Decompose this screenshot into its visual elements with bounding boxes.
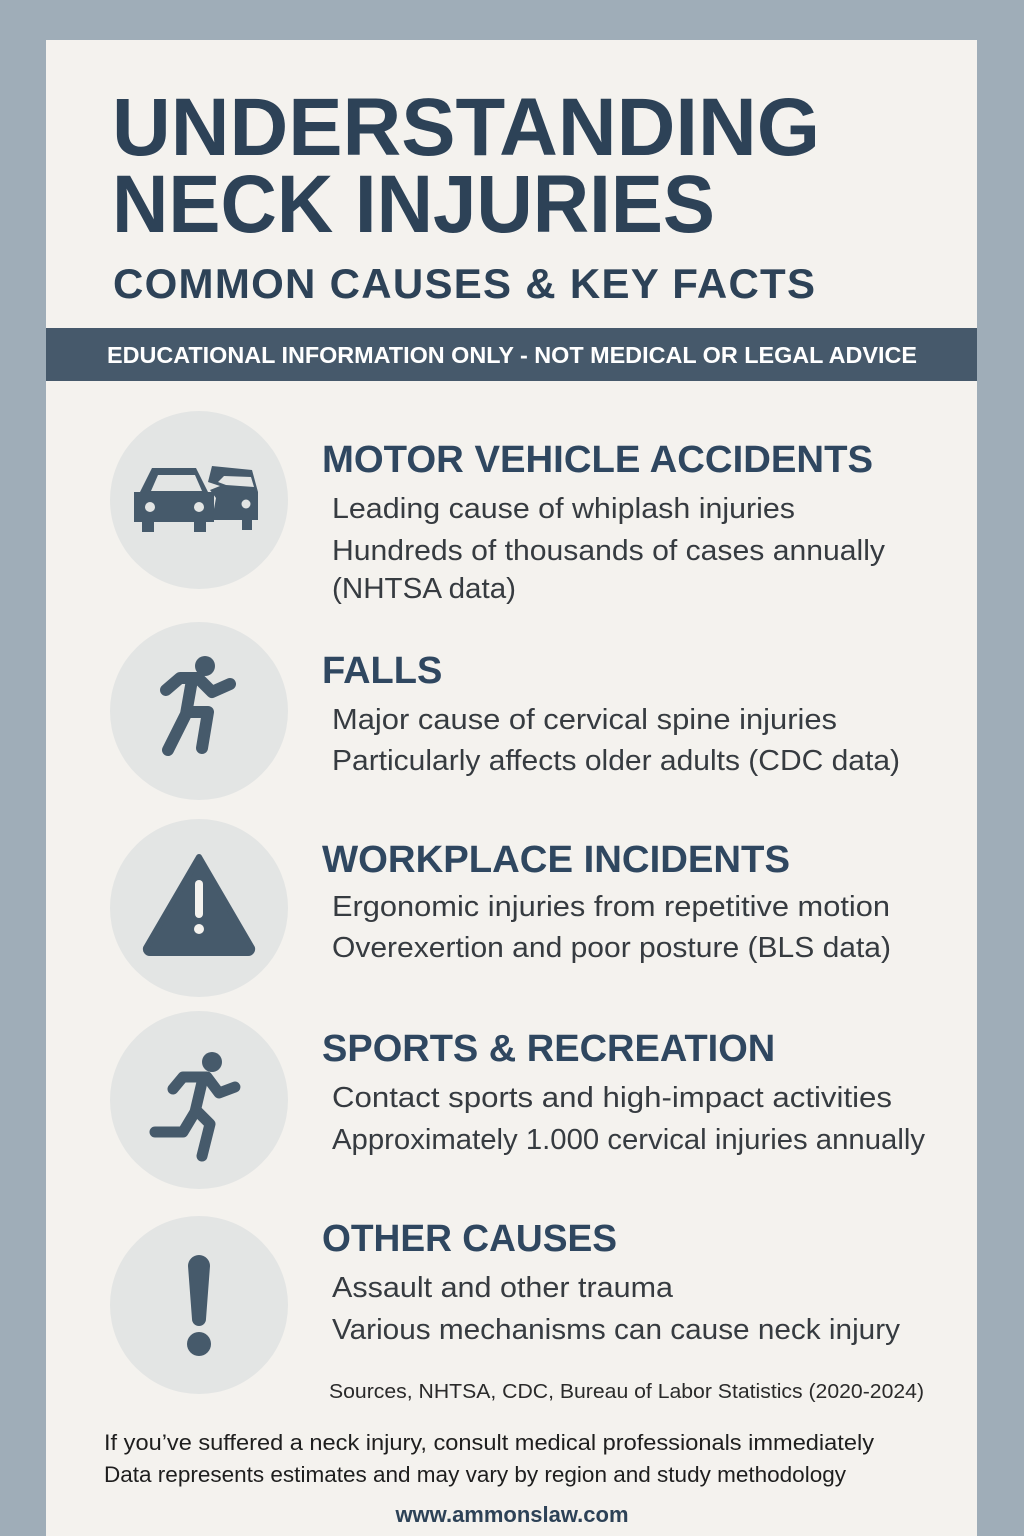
facts: Major cause of cervical spine injuries bbox=[332, 704, 837, 736]
title bbox=[112, 82, 820, 250]
disclaimer banner bbox=[46, 328, 977, 381]
footer notes: If you’ve suffered a neck injury, consult medical professionals immediately bbox=[104, 1430, 874, 1455]
title: UNDERSTANDING bbox=[112, 82, 820, 173]
subtitle: COMMON CAUSES & KEY FACTS bbox=[113, 260, 815, 307]
panel: other causes: Various mechanisms can cause neck injury bbox=[332, 1314, 901, 1346]
facts: Contact sports and high-impact activities bbox=[332, 1082, 892, 1114]
panel: falls bbox=[110, 622, 900, 800]
footer notes bbox=[104, 1430, 874, 1487]
icon: cars collision bbox=[110, 411, 288, 589]
icon: falling person bbox=[110, 622, 288, 800]
panel: other causes bbox=[110, 1216, 901, 1394]
panel: workplace incidents: Overexertion and poor posture (BLS data) bbox=[332, 932, 891, 964]
title: NECK INJURIES bbox=[112, 159, 715, 250]
heading: WORKPLACE INCIDENTS bbox=[322, 839, 790, 881]
facts: Ergonomic injuries from repetitive motion bbox=[332, 891, 890, 923]
heading: FALLS bbox=[322, 650, 442, 692]
facts: Assault and other trauma bbox=[332, 1272, 674, 1304]
icon: warning triangle bbox=[110, 819, 288, 997]
heading: OTHER CAUSES bbox=[322, 1218, 617, 1260]
sources: Sources, NHTSA, CDC, Bureau of Labor Statistics (2020-2024) bbox=[329, 1381, 924, 1403]
panel: motor vehicle accidents: Hundreds of thousands of cases annually bbox=[332, 535, 886, 567]
website url: www.ammonslaw.com bbox=[394, 1502, 629, 1527]
panel: workplace incidents bbox=[110, 819, 891, 997]
heading: SPORTS & RECREATION bbox=[322, 1028, 775, 1070]
panel: falls: Particularly affects older adults (CDC data) bbox=[332, 745, 900, 777]
panel: motor vehicle accidents: (NHTSA data) bbox=[332, 573, 516, 605]
icon: running person bbox=[110, 1011, 288, 1189]
heading: MOTOR VEHICLE ACCIDENTS bbox=[322, 439, 873, 481]
facts: Leading cause of whiplash injuries bbox=[332, 493, 795, 525]
panel: sports & recreation: Approximately 1.000 cervical injuries annually bbox=[332, 1124, 925, 1156]
disclaimer banner: EDUCATIONAL INFORMATION ONLY - NOT MEDICAL OR LEGAL ADVICE bbox=[107, 342, 917, 368]
icon: exclamation bbox=[110, 1216, 288, 1394]
panel: sports & recreation bbox=[110, 1011, 925, 1189]
footer notes: Data represents estimates and may vary by region and study methodology bbox=[104, 1462, 846, 1487]
panel: motor vehicle accidents bbox=[110, 411, 886, 605]
